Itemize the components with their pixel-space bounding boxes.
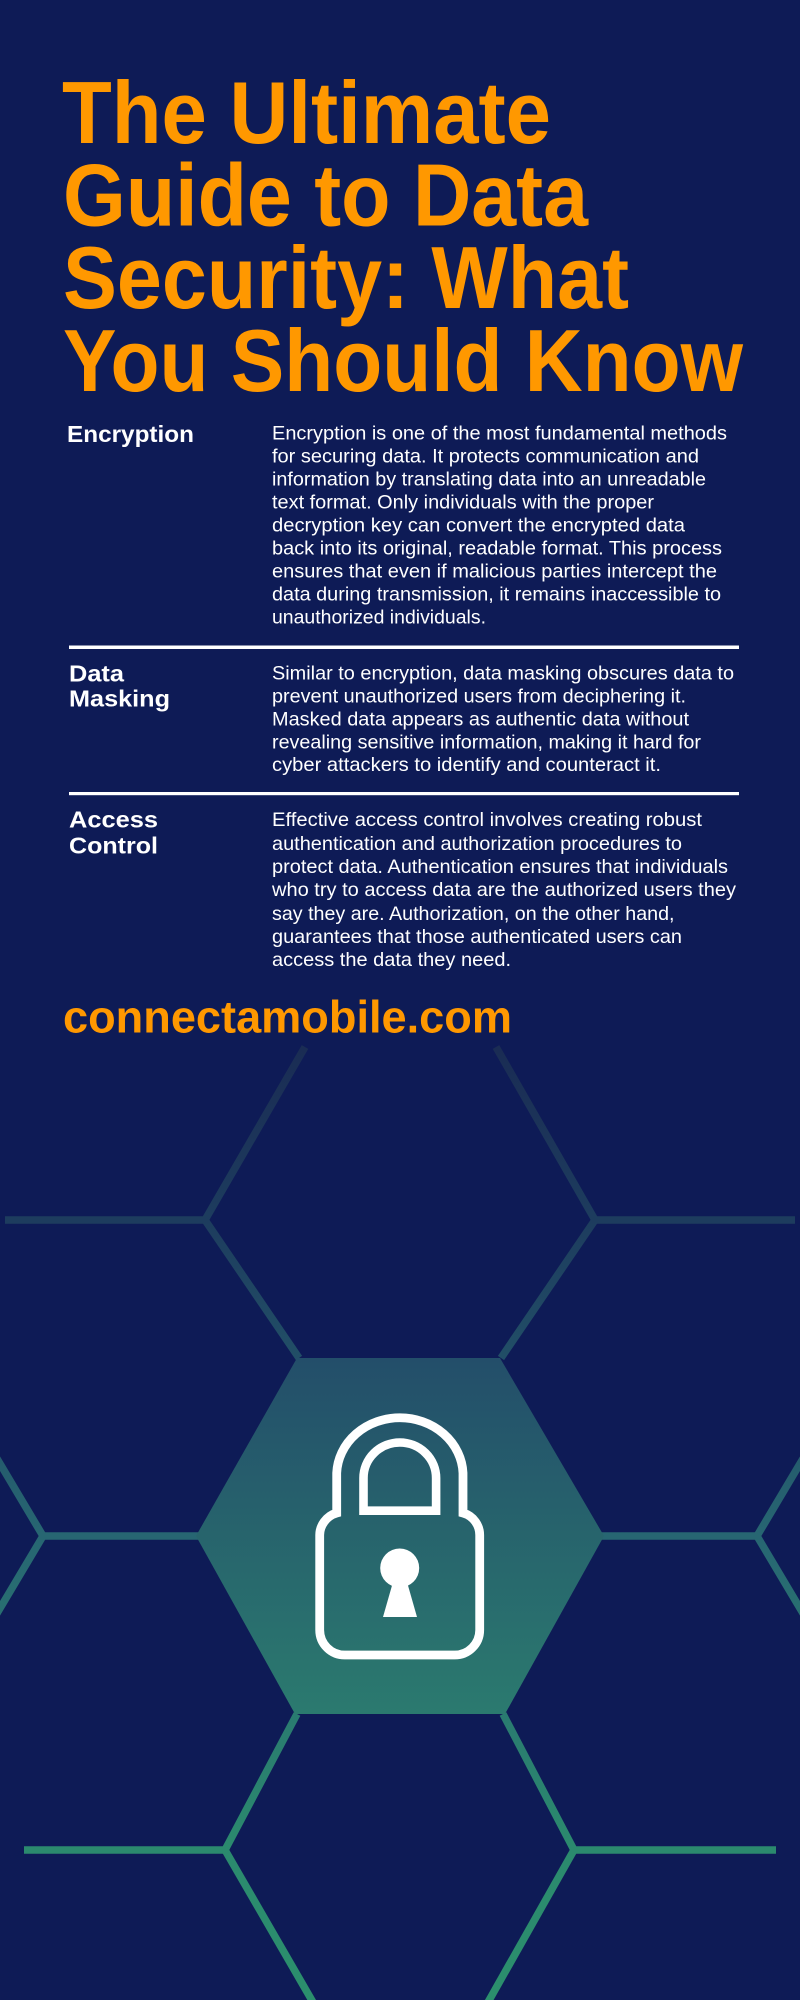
title: The Ultimate xyxy=(62,63,551,162)
text block: data masking description: cyber attackers to identify and counteract it. xyxy=(272,754,661,776)
text block: encryption description xyxy=(272,422,727,628)
text block: encryption description: data during transmission, it remains inaccessible to xyxy=(272,583,721,605)
text block: access control description: authentication and authorization procedures to xyxy=(272,833,682,855)
central hexagon xyxy=(196,1358,604,1714)
text block: access control description: protect data. Authentication ensures that individuals xyxy=(272,856,728,878)
text block: data masking description: prevent unauthorized users from deciphering it. xyxy=(272,685,686,707)
text block: access control description: who try to access data are the authorized users they xyxy=(271,879,736,901)
text block: encryption description: information by translating data into an unreadable xyxy=(272,468,706,490)
panel: access control xyxy=(69,807,736,971)
text block: access control description: say they are. Authorization, on the other hand, xyxy=(272,903,674,925)
text block: encryption description: for securing data. It protects communication and xyxy=(272,445,699,467)
panel: encryption xyxy=(67,421,727,628)
title: You Should Know xyxy=(63,311,743,410)
heading: encryption: Encryption xyxy=(67,421,194,447)
text block: access control description: Effective access control involves creating robust xyxy=(272,809,703,831)
text block: encryption description: ensures that even if malicious parties intercept the xyxy=(272,560,717,582)
heading: data masking: Data xyxy=(69,661,125,687)
text block: encryption description: Encryption is one of the most fundamental methods xyxy=(272,422,727,444)
hexagon network xyxy=(0,1047,800,2000)
heading: access control: Control xyxy=(69,832,158,858)
icon: padlock xyxy=(320,1418,480,1655)
heading: data masking: Masking xyxy=(69,686,170,712)
text block: encryption description: unauthorized individuals. xyxy=(272,606,486,628)
panel: data masking xyxy=(69,661,734,776)
text block: data masking description: revealing sensitive information, making it hard for xyxy=(272,731,701,753)
text block: encryption description: text format. Only individuals with the proper xyxy=(272,491,655,513)
text block: encryption description: decryption key can convert the encrypted data xyxy=(272,514,685,536)
text block: data masking description: Masked data appears as authentic data without xyxy=(272,708,690,730)
text block: access control description: access the data they need. xyxy=(272,949,511,971)
heading: access control xyxy=(69,807,158,858)
heading: data masking xyxy=(69,661,170,712)
title: Guide to Data xyxy=(63,146,589,244)
title xyxy=(62,63,743,410)
text block: encryption description: back into its original, readable format. This process xyxy=(272,537,722,559)
website url: connectamobile.com xyxy=(63,992,512,1043)
heading: access control: Access xyxy=(69,807,158,833)
text block: access control description: guarantees that those authenticated users can xyxy=(272,926,682,948)
text block: data masking description xyxy=(272,662,734,776)
text block: access control description xyxy=(271,809,736,971)
text block: data masking description: Similar to encryption, data masking obscures data to xyxy=(272,662,734,684)
title: Security: What xyxy=(63,228,629,327)
